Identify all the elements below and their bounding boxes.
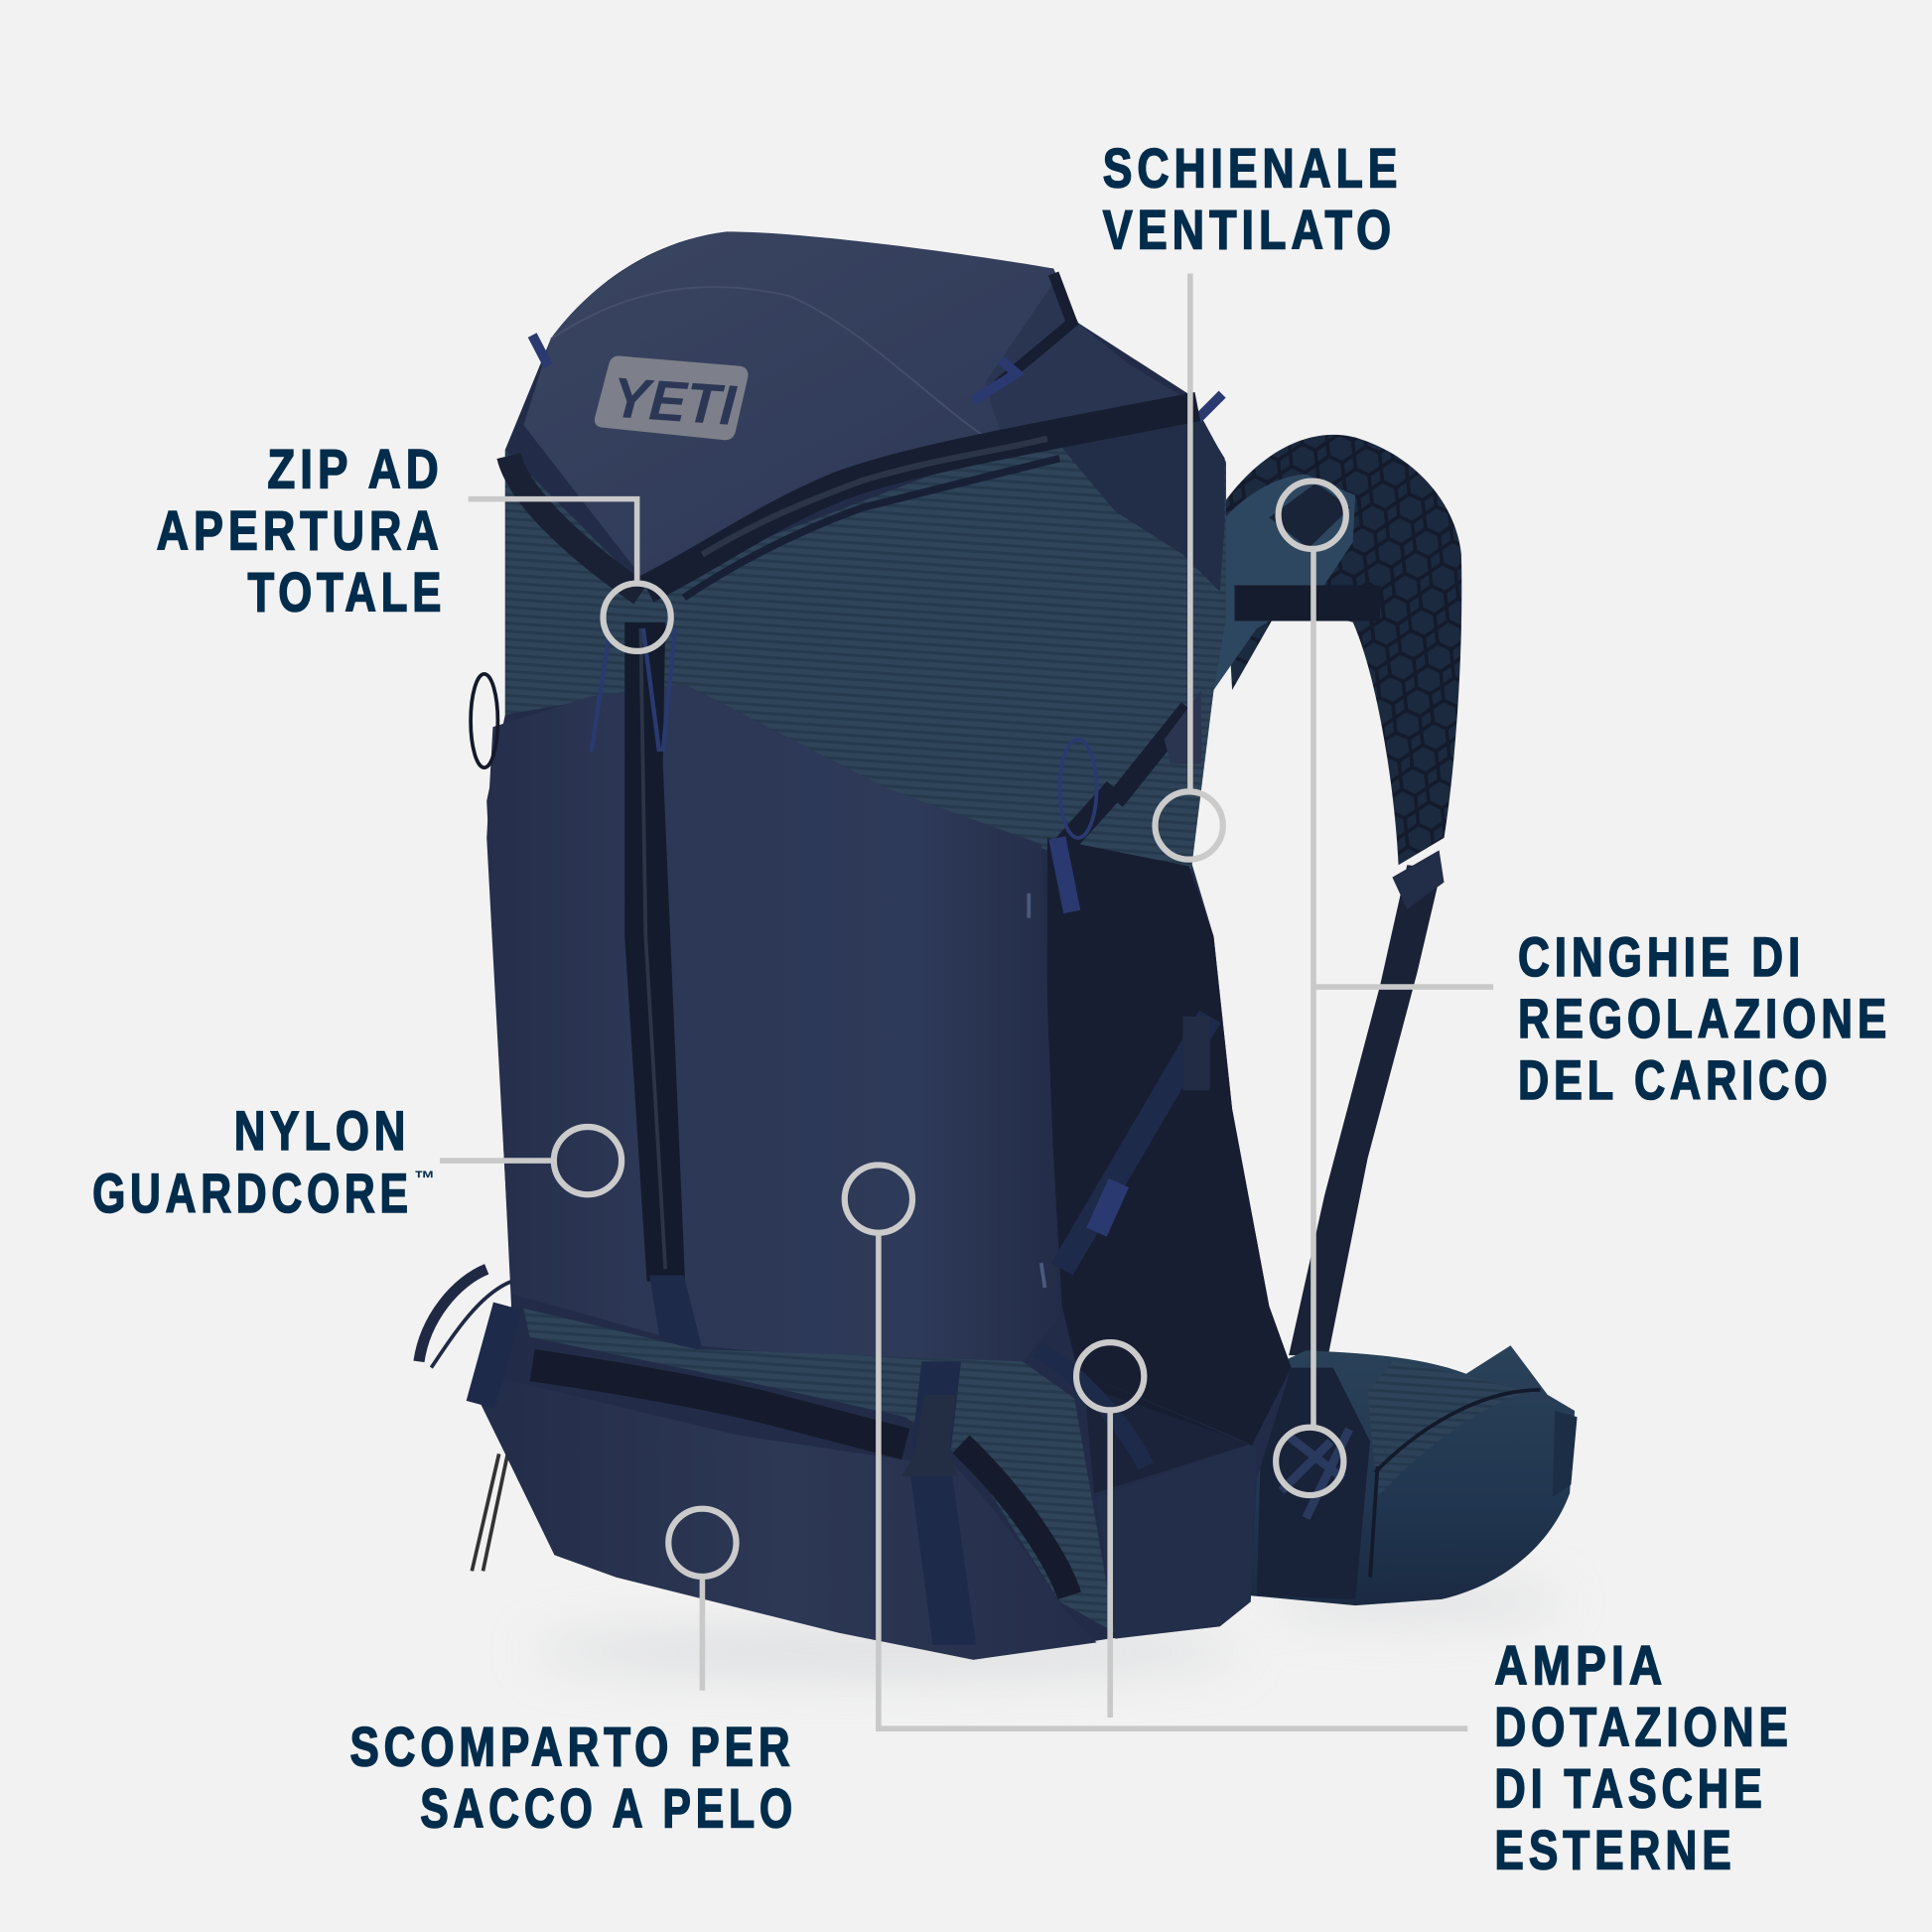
top loops	[532, 336, 1222, 419]
heading: scomparto	[349, 1715, 797, 1840]
callout: zip ad apertura totale	[157, 437, 671, 651]
upper back solid panel	[1053, 407, 1225, 592]
heading: ampia: DOTAZIONE	[1494, 1696, 1793, 1758]
heading: ampia: ESTERNE	[1494, 1819, 1736, 1881]
lid	[523, 231, 1189, 579]
front panel	[486, 684, 1059, 1361]
ground shadow	[530, 1585, 1565, 1676]
vertical zip	[624, 622, 685, 1282]
heading: nylon: GUARDCORE	[92, 1162, 413, 1224]
heading: zip: APERTURA	[157, 499, 444, 562]
mesh panel	[505, 400, 1226, 869]
lid rear panel	[986, 277, 1189, 441]
leader line and marker: schienale	[1156, 274, 1223, 860]
heading: nylon: ™	[414, 1168, 435, 1190]
heading: zip: TOTALE	[247, 561, 446, 623]
callout: cinghie di regolazione del carico	[1276, 482, 1891, 1495]
leader lines and markers: ampia	[845, 1165, 1467, 1728]
heading: cinghie	[1518, 925, 1891, 1111]
bottom pocket	[479, 1380, 1097, 1660]
heading: ampia: AMPIA	[1494, 1634, 1667, 1697]
heading: cinghie: DEL CARICO	[1518, 1048, 1832, 1111]
leader line and marker: zip	[469, 499, 671, 651]
heading: scomparto: SACCO A PELO	[420, 1777, 797, 1840]
callout: scomparto per sacco a pelo	[349, 1509, 797, 1840]
heading: scomparto: SCOMPARTO PER	[349, 1715, 794, 1777]
heading: nylon	[92, 1099, 435, 1224]
webbing straps and buckles	[481, 690, 1210, 1645]
heading: cinghie: CINGHIE DI	[1518, 925, 1805, 988]
leader line and marker: nylon	[440, 1127, 621, 1194]
leader line and marker: scomparto	[668, 1509, 737, 1691]
callout: ampia dotazione di tasche esterne	[845, 1165, 1793, 1881]
heading: schienale: SCHIENALE	[1103, 137, 1402, 200]
yeti logo: YETI	[611, 366, 739, 438]
heading: zip	[157, 437, 446, 623]
side cords	[419, 674, 511, 1571]
shoulder harness	[1213, 435, 1461, 1355]
leader lines and markers: cinghie	[1276, 482, 1493, 1495]
callout: schienale ventilato	[1103, 137, 1402, 860]
heading: schienale	[1103, 137, 1402, 261]
callout: nylon guardcore	[92, 1099, 621, 1224]
heading: ampia	[1494, 1634, 1793, 1881]
mesh band lower	[523, 1309, 1115, 1632]
zip band	[509, 407, 1197, 598]
heading: schienale: VENTILATO	[1103, 199, 1396, 261]
heading: nylon: NYLON	[234, 1099, 410, 1162]
backpack illustration	[419, 231, 1578, 1676]
zip pulls	[592, 628, 675, 752]
lower zip	[532, 1365, 905, 1445]
hip pouch	[1251, 1345, 1578, 1605]
heading: ampia: DI TASCHE	[1494, 1757, 1767, 1820]
heading: zip: ZIP AD	[267, 437, 444, 499]
main body silhouette	[479, 231, 1292, 1660]
side dark pocket	[1047, 838, 1292, 1448]
lower right panel	[1069, 1368, 1257, 1639]
